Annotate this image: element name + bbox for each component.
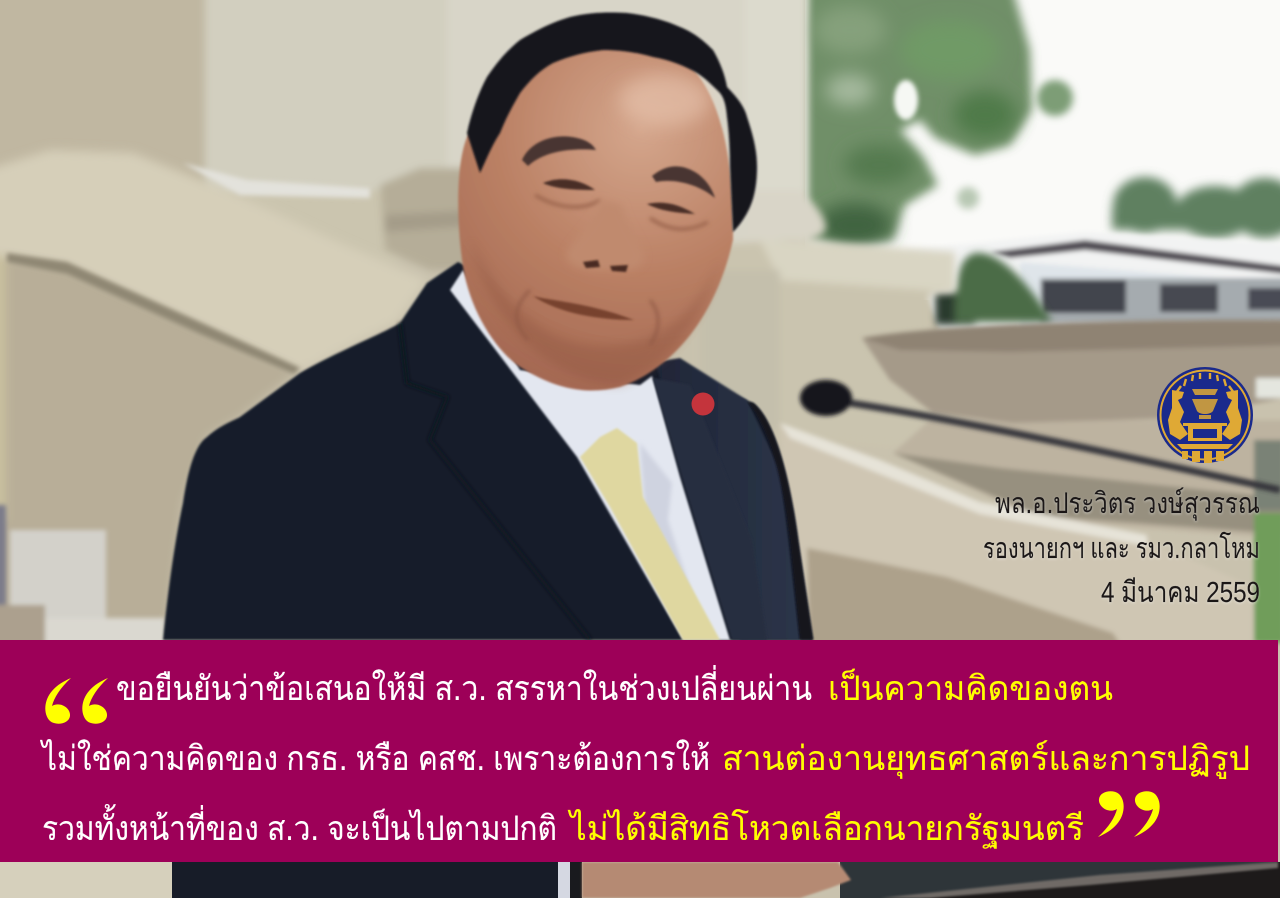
balustrade shading: [0, 163, 370, 648]
emblem flame row: [1176, 373, 1234, 393]
distant building: [905, 232, 1280, 330]
right eyebrow: [652, 166, 715, 198]
jacket: [163, 262, 813, 640]
sky gap in the tree: [894, 80, 918, 120]
quote line 2: ไม่ใช่ความคิดของ กรธ. หรือ คสช. เพราะต้องการให้: [39, 739, 710, 778]
mouth: [533, 296, 634, 320]
quote line 3: [42, 804, 1084, 849]
quote band: [0, 640, 1278, 862]
small far foliage: [957, 187, 979, 209]
curved stair balustrade: [0, 150, 427, 660]
quote line 2: [39, 739, 1250, 779]
shrub: [935, 253, 1052, 325]
tie: [580, 428, 720, 640]
cheek fold: [517, 290, 658, 345]
microphone: [800, 380, 1280, 490]
tree foliage: [806, 0, 1032, 240]
tree satellite leaves: [1037, 80, 1073, 116]
left eyebrow: [522, 136, 596, 166]
quote line 1: เป็นความคิดของตน: [828, 668, 1113, 708]
quote line 3: ไม่ได้มีสิทธิโหวตเลือกนายกรัฐมนตรี: [567, 809, 1084, 849]
icon: opening quotation marks: [45, 678, 108, 724]
under-eye bags: [535, 195, 708, 229]
forehead highlight: [619, 74, 711, 126]
lower face shadow: [470, 240, 720, 385]
right eye: [647, 203, 695, 214]
strip below the band: suit, hand and lectern: [0, 862, 1280, 898]
face: [458, 35, 733, 390]
stone bowl and right stairs: [780, 320, 1280, 660]
nose shading: [566, 200, 644, 270]
right coat panel: [655, 358, 800, 640]
right lapel: [653, 378, 767, 640]
quote line 1: ขอยืนยันว่าข้อเสนอให้มี ส.ว. สรรหาในช่วงเปลี่ยนผ่าน: [116, 665, 812, 708]
portrait of the speaker: [163, 12, 813, 640]
distant trees: [1112, 177, 1280, 238]
icon: closing quotation marks: [1098, 791, 1160, 837]
coat edge shadow: [748, 402, 813, 640]
emblem pedestal: [1183, 423, 1227, 441]
emblem: Office of the Government seal: [1157, 367, 1253, 463]
hair: [467, 12, 757, 232]
quote line 3: รวมทั้งหน้าที่ของ ส.ว. จะเป็นไปตามปกติ: [42, 804, 557, 848]
emblem base row: [1177, 444, 1233, 463]
quote line 1: [116, 665, 1113, 708]
left eye: [543, 179, 595, 190]
foliage light and dark patches: [814, 6, 1017, 247]
left lapel seam: [400, 323, 590, 640]
caption: speaker name, title and date: [983, 487, 1260, 609]
lapel pin: [692, 392, 714, 416]
emblem central bowl: [1192, 389, 1218, 419]
emblem left lion: [1168, 390, 1188, 440]
quote line 2: สานต่องานยุทธศาสตร์และการปฏิรูป: [722, 740, 1250, 779]
shirt and collar: [450, 270, 730, 640]
building walls and pillars: [0, 0, 955, 450]
collar shadow: [640, 443, 700, 620]
nostrils: [583, 260, 628, 272]
emblem right lion: [1222, 390, 1242, 440]
